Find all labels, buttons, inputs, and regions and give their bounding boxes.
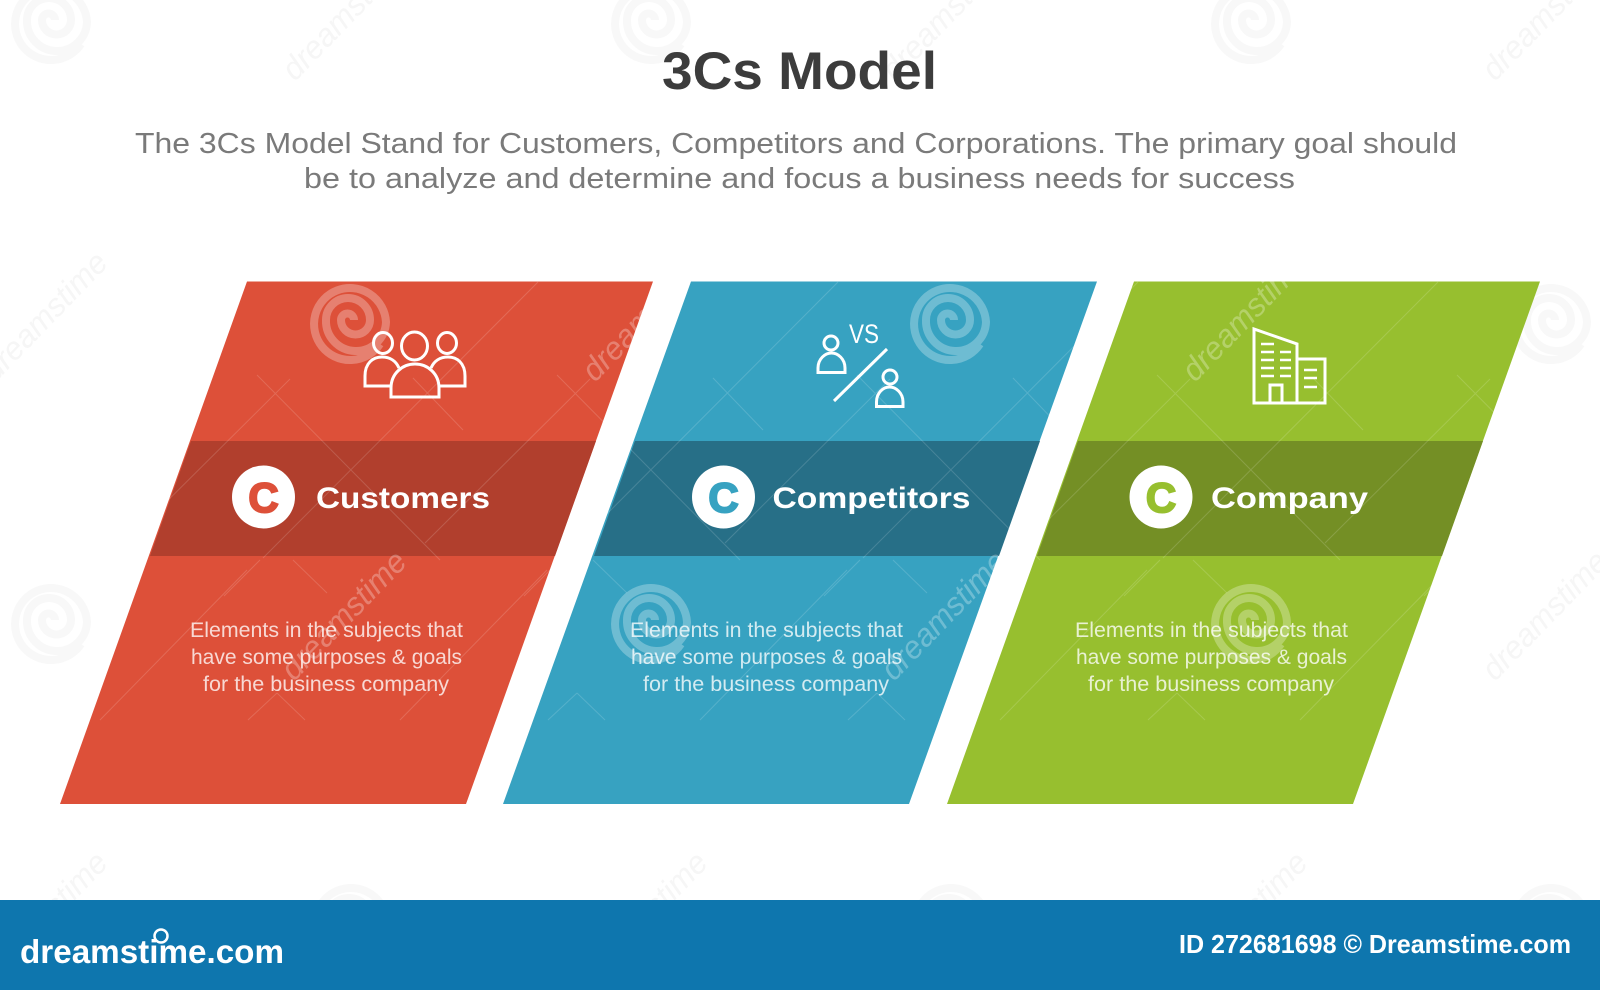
panel watermark spirals and wordmarks: dreamstime: [1174, 244, 1315, 388]
subtitle: be to analyze and determine and focus a business needs for success: [304, 163, 1295, 195]
customers heading: C: [248, 474, 279, 521]
competitors description: have some purposes & goals: [631, 646, 902, 669]
subtitle: [135, 128, 1457, 195]
company description: Elements in the subjects that: [1075, 619, 1348, 642]
panel watermark spirals and wordmarks: dreamstime: [873, 543, 1014, 687]
customers heading: [232, 466, 490, 528]
panel: competitors: [503, 282, 1097, 804]
competitors description: Elements in the subjects that: [630, 619, 903, 642]
competitors heading: Competitors: [772, 482, 970, 515]
panel watermark spirals and wordmarks: dreamstime: [273, 543, 414, 687]
background watermark: dreamstime: [1174, 844, 1315, 988]
subtitle: The 3Cs Model Stand for Customers, Competitors and Corporations. The primary goal should: [135, 128, 1457, 160]
company heading: C: [1146, 474, 1176, 521]
competitors heading: [692, 466, 970, 528]
competitors description: [630, 619, 903, 696]
company band: [1037, 441, 1483, 556]
panel watermark spirals and wordmarks: dreamstime: [574, 244, 715, 388]
company description: have some purposes & goals: [1076, 646, 1347, 669]
company heading: [1130, 466, 1368, 528]
background watermark: dreamstime: [574, 844, 715, 988]
competitors band: [594, 441, 1040, 556]
footer logo: dreamstime.com: [20, 933, 284, 970]
footer credit: ID 272681698 © Dreamstime.com: [1179, 929, 1571, 959]
customers description: Elements in the subjects that: [190, 619, 463, 642]
customers description: for the business company: [203, 673, 450, 696]
customers description: [190, 619, 463, 696]
customers band: [150, 441, 596, 556]
icon: customers group: [365, 332, 465, 397]
panel watermark lines: [0, 282, 1600, 720]
icon: company building: [1254, 329, 1325, 403]
panel: customers: [60, 282, 653, 804]
panel: company: [947, 282, 1540, 804]
company description: for the business company: [1088, 673, 1335, 696]
panel watermark spirals and wordmarks: [273, 244, 1315, 687]
customers description: have some purposes & goals: [191, 646, 462, 669]
icon: versus: VS: [849, 319, 879, 349]
title: 3Cs Model: [662, 42, 937, 101]
customers heading: Customers: [316, 482, 490, 515]
footer bar: [0, 900, 1600, 990]
company heading: Company: [1211, 482, 1368, 515]
company description: [1075, 619, 1348, 696]
competitors description: for the business company: [643, 673, 890, 696]
icon: versus: [818, 319, 903, 406]
competitors heading: C: [708, 474, 739, 521]
